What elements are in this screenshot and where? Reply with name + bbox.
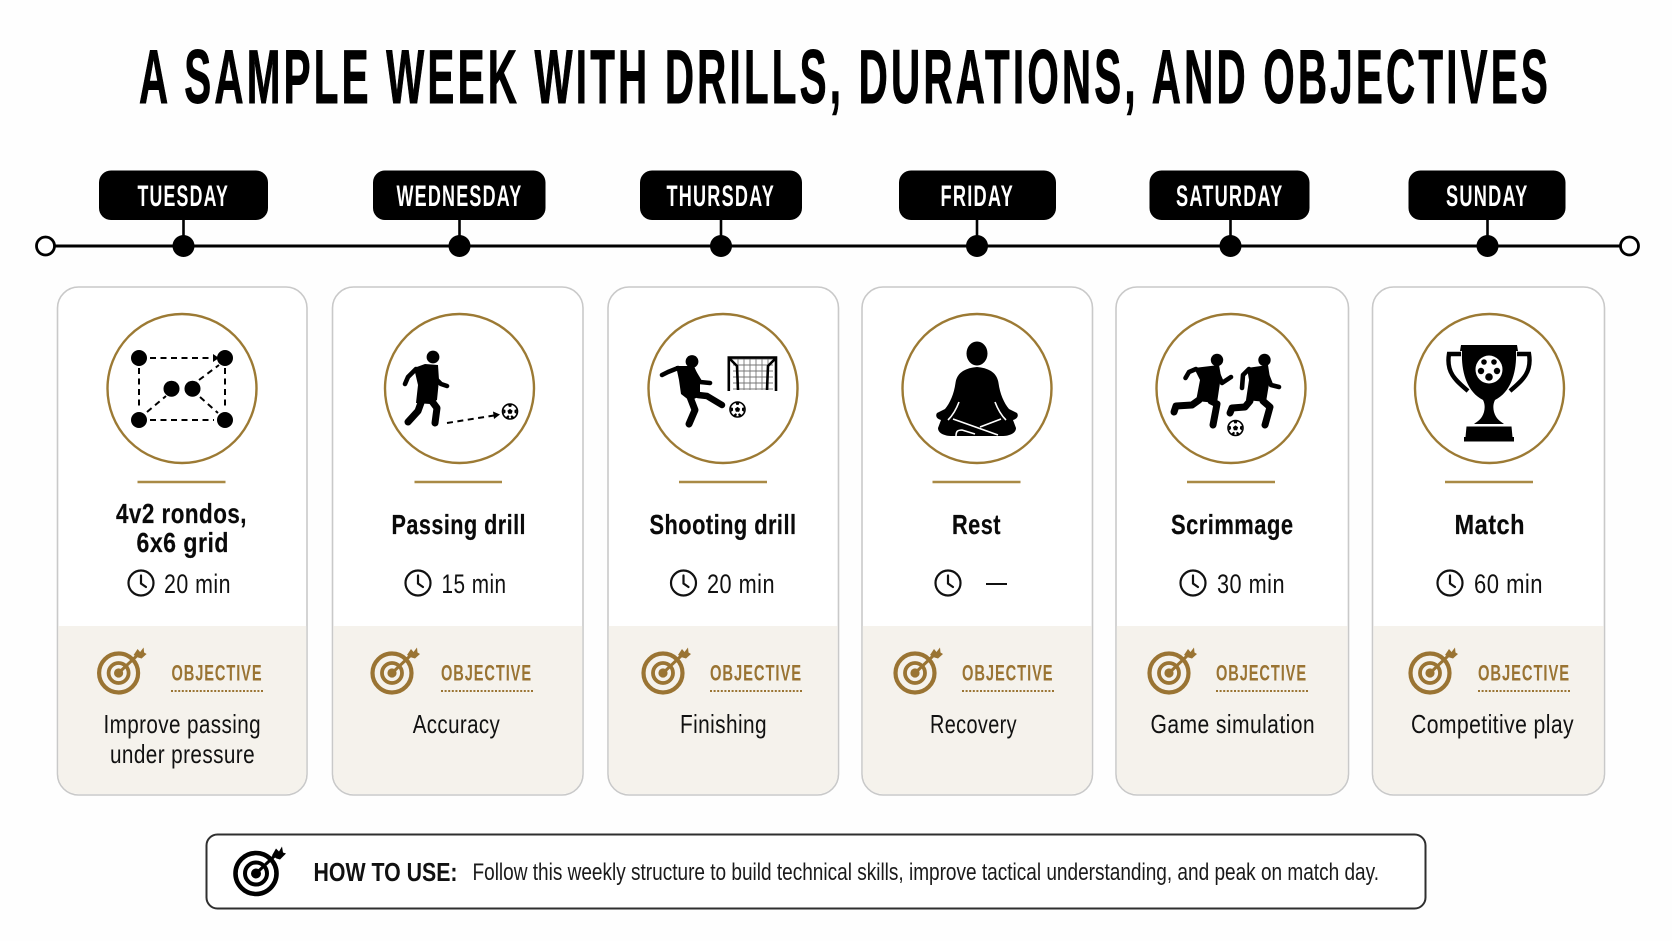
objective: Game simulation [1150, 709, 1315, 739]
drill name [116, 498, 247, 558]
drill name: Rest [952, 509, 1001, 540]
day marker: Sunday [1408, 170, 1566, 257]
objective: Finishing [680, 709, 767, 739]
drill name: 4v2 rondos, [116, 498, 247, 529]
duration [128, 569, 231, 599]
day marker: Wednesday: WEDNESDAY [396, 180, 522, 213]
panel: Sunday card [1372, 287, 1604, 795]
drill name: 6x6 grid [136, 527, 229, 558]
objective [99, 648, 264, 769]
callout: how to use [206, 834, 1426, 908]
icon: trophy [1415, 314, 1564, 463]
objective: under pressure [110, 739, 255, 769]
day marker: Saturday: SATURDAY [1176, 180, 1284, 213]
objective: Improve passing [104, 709, 261, 739]
icon: black target [236, 846, 286, 894]
duration [936, 570, 1007, 596]
drill name: Passing drill [392, 509, 526, 540]
duration [1180, 569, 1285, 599]
drill name: Scrimmage [1171, 509, 1294, 540]
objective [896, 648, 1054, 739]
drill name: Match [1454, 509, 1525, 540]
objective [1410, 648, 1574, 739]
duration [671, 569, 775, 599]
day marker: Thursday [640, 170, 802, 257]
objective: Competitive play [1411, 709, 1574, 739]
objective: OBJECTIVE [962, 660, 1054, 686]
callout heading: HOW TO USE: [314, 857, 458, 887]
panel: Wednesday card [332, 287, 583, 795]
objective [372, 648, 534, 739]
panel: Tuesday card [58, 287, 307, 795]
timeline start marker [36, 237, 54, 255]
icon: rondo grid [108, 314, 256, 463]
day marker: Tuesday [99, 170, 268, 257]
objective [1150, 648, 1315, 739]
objective: Accuracy [413, 709, 500, 739]
objective: OBJECTIVE [1216, 660, 1307, 686]
duration: 30 min [1217, 569, 1285, 599]
panel: Thursday card [608, 287, 838, 795]
day marker: Thursday: THURSDAY [666, 180, 775, 213]
timeline [36, 170, 1638, 257]
duration: 20 min [707, 569, 775, 599]
duration [1438, 569, 1543, 599]
timeline end marker [1620, 237, 1638, 255]
day marker: Friday [899, 170, 1056, 257]
icon: two players [1156, 314, 1306, 463]
day marker: Tuesday: TUESDAY [138, 180, 229, 213]
objective: OBJECTIVE [710, 660, 802, 686]
objective: OBJECTIVE [172, 660, 262, 686]
panel: Saturday card [1116, 287, 1348, 795]
icon: shooting player and goal [648, 314, 798, 463]
duration: 60 min [1474, 569, 1543, 599]
duration: 20 min [164, 569, 231, 599]
day marker: Saturday [1150, 170, 1310, 257]
day marker: Wednesday [373, 170, 546, 257]
panel: Friday card [862, 287, 1092, 795]
duration: 15 min [442, 569, 506, 599]
drill name: Shooting drill [650, 509, 796, 540]
duration [406, 569, 506, 599]
objective: Recovery [930, 709, 1017, 739]
objective: OBJECTIVE [1478, 660, 1570, 686]
icon: meditation figure [902, 314, 1052, 463]
callout text: Follow this weekly structure to build technical skills, improve tactical understanding, and peak on match day. [472, 859, 1379, 886]
day marker: Friday: FRIDAY [940, 180, 1014, 213]
icon: passing player [385, 314, 534, 463]
objective [644, 648, 803, 739]
objective: OBJECTIVE [441, 660, 532, 686]
day marker: Sunday: SUNDAY [1446, 180, 1528, 213]
